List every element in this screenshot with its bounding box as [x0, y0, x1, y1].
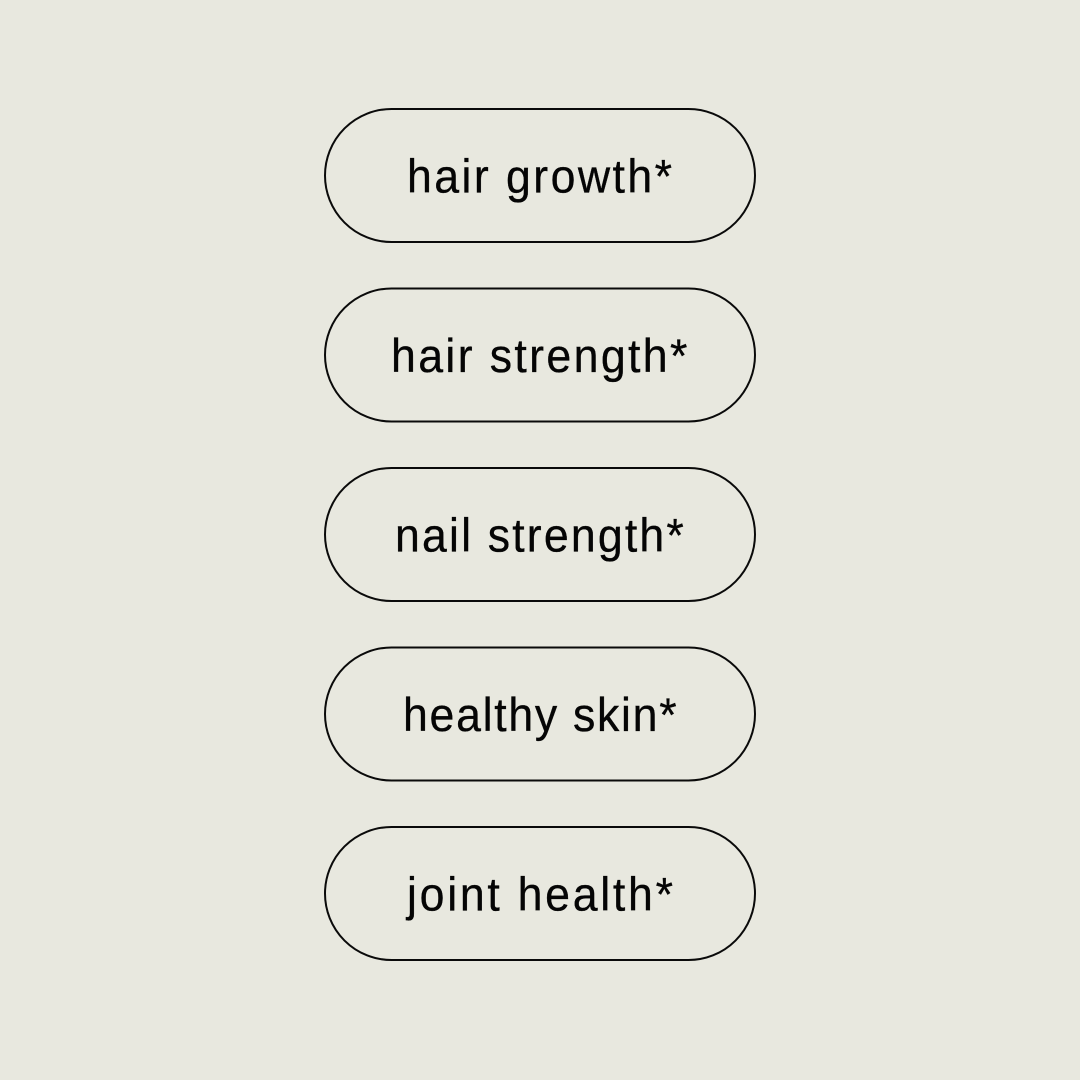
pill: hair growth: hair growth*	[407, 150, 672, 203]
pill: hair growth	[325, 109, 755, 242]
pill: healthy skin: healthy skin*	[403, 689, 677, 741]
pill: nail strength: nail strength*	[395, 509, 684, 562]
pill: hair strength	[325, 288, 755, 422]
pill: hair strength: hair strength*	[391, 330, 688, 382]
pill: healthy skin	[325, 648, 755, 780]
pill: joint health: joint health*	[405, 868, 673, 921]
pill: nail strength	[325, 468, 755, 601]
pill: joint health	[325, 827, 755, 960]
